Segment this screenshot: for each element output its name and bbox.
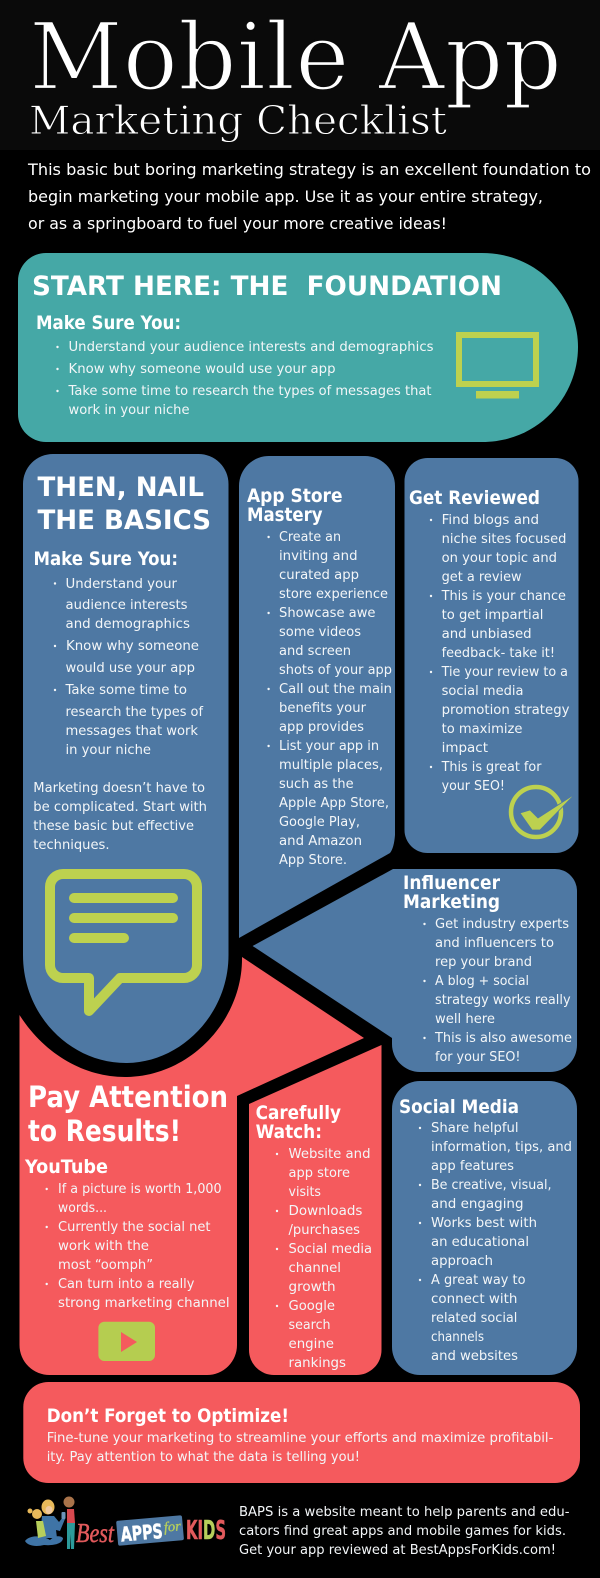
app store checklist: multiple places, [279,757,383,773]
social media checklist: A great way to [431,1272,526,1288]
get reviewed checklist: This is your chance [441,588,566,604]
logo badge APPS for: for [163,1519,182,1536]
app store checklist: Google Play, [279,814,360,830]
social media checklist: Share helpful [431,1120,519,1136]
carefully watch checklist: rankings [288,1355,346,1371]
panel: influencer marketing [253,869,577,1072]
influencer checklist: strategy works really [435,992,571,1008]
social media checklist [419,1120,572,1364]
intro text: This basic but boring marketing strategy is an excellent foundation to [27,160,591,179]
foundation subheading: Make Sure You: [36,312,181,334]
app store checklist: App Store. [279,852,347,868]
influencer checklist: and influencers to [435,935,554,951]
get reviewed checklist [430,512,570,794]
app store checklist: store experience [279,586,388,602]
carefully watch checklist: Downloads [288,1203,362,1219]
optimize text [47,1430,554,1465]
app store heading: Mastery [247,504,323,526]
influencer checklist: rep your brand [435,954,532,970]
influencer checklist: This is also awesome [434,1030,572,1046]
get reviewed checklist: feedback- take it! [442,645,555,661]
basics checklist: research the types of [66,704,204,720]
app store heading: App Store [247,485,342,507]
icon: check mark [511,787,575,837]
get reviewed checklist: to get impartial [442,607,543,623]
social media checklist: Be creative, visual, [431,1177,552,1193]
logo badge APPS for: APPS [120,1519,164,1547]
panel: social media [392,1081,577,1375]
icon: monitor [459,335,536,398]
icon: chat bubble [50,874,197,1011]
get reviewed checklist: and unbiased [442,626,532,642]
social media checklist: channels [431,1329,484,1345]
influencer checklist [423,916,572,1065]
intro text [27,160,591,233]
footer text: Get your app reviewed at BestAppsForKids.com! [239,1542,556,1558]
title: Mobile App [29,3,562,111]
carefully watch checklist: engine [288,1336,334,1352]
logo illustration [25,1496,75,1549]
footer text: BAPS is a website meant to help parents and edu- [239,1504,570,1520]
app store checklist [267,529,392,868]
carefully watch checklist: channel [288,1260,341,1276]
influencer checklist: for your SEO! [435,1049,520,1065]
carefully watch checklist: app store [288,1165,350,1181]
results heading: to Results! [28,1114,181,1148]
get reviewed checklist: promotion strategy [442,702,570,718]
carefully watch checklist [276,1146,372,1371]
influencer checklist: A blog + social [435,973,529,989]
footer text: cators find great apps and mobile games for kids. [239,1523,566,1539]
carefully watch checklist: visits [288,1184,321,1200]
basics checklist [54,576,204,758]
get reviewed checklist: Find blogs and [442,512,539,528]
foundation checklist: Take some time to research the types of messages that [68,383,432,399]
app store checklist: and screen [279,643,351,659]
basics note [33,780,207,853]
youtube checklist: most “oomph” [58,1257,153,1273]
app store checklist: shots of your app [279,662,392,678]
panel: nail the basics [23,454,228,1063]
app store checklist: curated app [279,567,359,583]
app store heading [247,485,342,526]
intro text: begin marketing your mobile app. Use it as your entire strategy, [28,187,543,206]
panel: app store mastery [239,456,395,938]
optimize heading: Don’t Forget to Optimize! [47,1405,289,1427]
panel: pay attention to results [19,957,364,1375]
panel: carefully watch [249,1045,382,1375]
foundation checklist: work in your niche [68,402,190,418]
social media checklist: and websites [431,1348,518,1364]
carefully watch heading: Watch: [256,1121,322,1143]
influencer checklist: Get industry experts [435,916,569,932]
youtube checklist: strong marketing channel [58,1295,230,1311]
get reviewed checklist: Tie your review to a [441,664,568,680]
youtube checklist: If a picture is worth 1,000 [58,1181,222,1197]
app store checklist: Create an [279,529,341,545]
youtube checklist: Can turn into a really [58,1276,194,1292]
social media checklist: Works best with [431,1215,537,1231]
app store checklist: List your app in [279,738,379,754]
get reviewed checklist: niche sites focused [442,531,566,547]
icon: play button [98,1322,155,1361]
carefully watch checklist: search [288,1317,331,1333]
basics checklist: Know why someone [66,638,199,654]
app store checklist: app provides [279,719,364,735]
youtube checklist: words... [58,1200,107,1216]
social media checklist: app features [431,1158,514,1174]
carefully watch checklist: Google [288,1298,335,1314]
basics checklist: Understand your [66,576,177,592]
get reviewed checklist: your SEO! [442,778,505,794]
social media checklist: information, tips, and [431,1139,572,1155]
influencer checklist: well here [435,1011,495,1027]
influencer heading [403,872,501,913]
basics checklist: would use your app [66,660,195,676]
basics checklist: and demographics [66,616,190,632]
footer text [239,1504,570,1558]
carefully watch checklist: Social media [288,1241,372,1257]
optimize text: ity. Pay attention to what the data is telling you! [47,1449,360,1465]
youtube checklist [46,1181,230,1311]
carefully watch heading: Carefully [256,1102,342,1124]
app store checklist: Call out the main [279,681,392,697]
carefully watch heading [256,1102,342,1143]
panel: get reviewed [404,458,578,853]
get reviewed checklist: to maximize [442,721,522,737]
basics note: techniques. [33,837,109,853]
logo wordmark KIDS: KIDS [186,1516,226,1546]
get reviewed heading: Get Reviewed [409,487,540,509]
basics heading: THEN, NAIL [38,472,204,503]
app store checklist: Apple App Store, [279,795,389,811]
basics checklist: messages that work [66,723,198,739]
foundation checklist: Understand your audience interests and demographics [68,339,434,355]
basics note: these basic but effective [33,818,194,834]
youtube checklist: Currently the social net [58,1219,210,1235]
basics note: be complicated. Start with [33,799,207,815]
results heading: Pay Attention [28,1080,228,1114]
social media checklist: connect with [431,1291,517,1307]
get reviewed checklist: on your topic and [442,550,557,566]
logo wordmark Best: Best [76,1518,115,1548]
social media heading: Social Media [399,1096,519,1118]
social media checklist: and engaging [431,1196,524,1212]
app store checklist: some videos [279,624,361,640]
optimize text: Fine-tune your marketing to streamline your efforts and maximize profitabil- [47,1430,554,1446]
app store checklist: benefits your [279,700,366,716]
foundation checklist [56,339,434,418]
foundation heading: START HERE: THE FOUNDATION [32,271,502,302]
influencer heading: Marketing [403,891,500,913]
carefully watch checklist: Website and [288,1146,370,1162]
social media checklist: approach [431,1253,493,1269]
basics note: Marketing doesn’t have to [33,780,205,796]
basics subheading: Make Sure You: [34,548,178,570]
get reviewed checklist: social media [442,683,524,699]
panel: optimize [23,1382,580,1483]
get reviewed checklist: impact [442,740,488,756]
basics checklist: Take some time to [65,682,187,698]
logo: Best Apps for Kids [25,1496,226,1549]
carefully watch checklist: growth [288,1279,336,1295]
carefully watch checklist: /purchases [288,1222,360,1238]
app store checklist: such as the [279,776,354,792]
influencer heading: Influencer [403,872,501,894]
intro text: or as a springboard to fuel your more creative ideas! [28,214,447,233]
youtube checklist: work with the [58,1238,149,1254]
social media checklist: an educational [431,1234,529,1250]
app store checklist: and Amazon [279,833,362,849]
app store checklist: inviting and [279,548,358,564]
get reviewed checklist: This is great for [441,759,542,775]
title: Marketing Checklist [29,99,447,144]
youtube subheading: YouTube [24,1156,108,1178]
basics heading [38,472,211,536]
get reviewed checklist: get a review [442,569,522,585]
basics heading: THE BASICS [38,505,211,536]
basics checklist: in your niche [66,742,151,758]
panel: foundation [18,253,578,442]
social media checklist: related social [431,1310,517,1326]
app store checklist: Showcase awe [279,605,376,621]
results heading [28,1080,228,1148]
basics checklist: audience interests [66,597,188,613]
foundation checklist: Know why someone would use your app [68,361,336,377]
